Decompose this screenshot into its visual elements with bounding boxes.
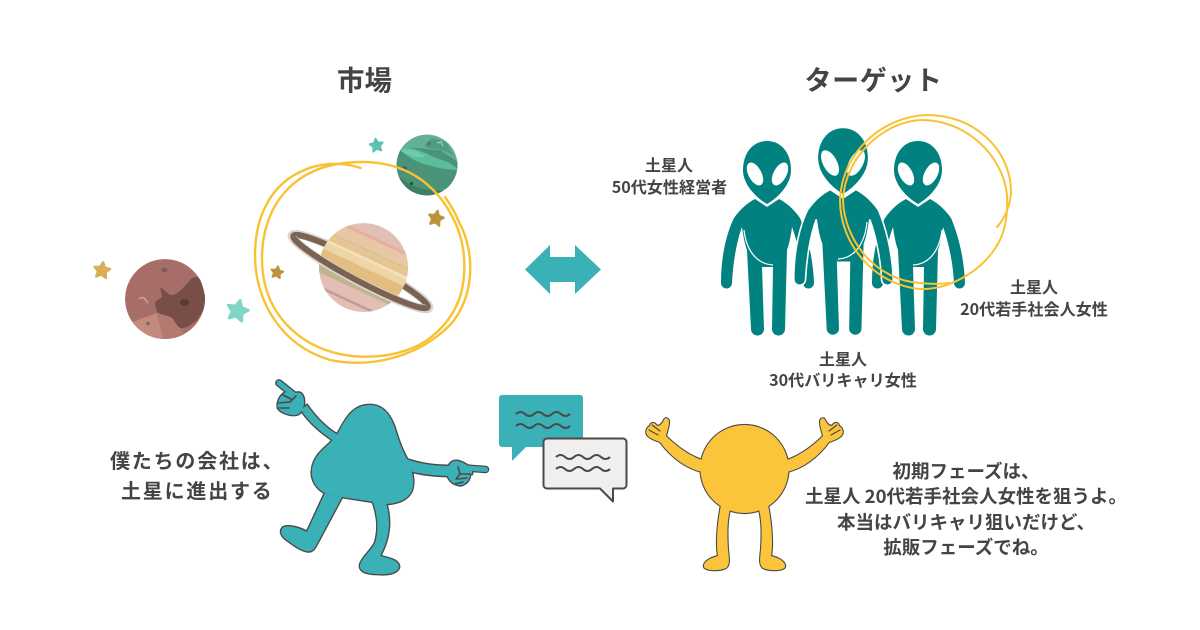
- text: initial phase explanation: 拡販フェーズでね。: [883, 534, 1049, 560]
- yellow scribble circle: market: [255, 162, 470, 363]
- saturn body bands: [319, 223, 408, 312]
- text: we enter saturn: 土星に進出する: [121, 475, 274, 504]
- text: initial phase explanation: [805, 458, 1127, 560]
- star: teal small: [369, 138, 384, 152]
- label: 50s executive: 土星人: [645, 152, 693, 176]
- text: initial phase explanation: 初期フェーズは、: [892, 458, 1040, 484]
- infographic: market and target: [93, 66, 1116, 576]
- label: 20s worker: 20代若手社会人女性: [960, 296, 1108, 320]
- star: mint: [225, 298, 250, 322]
- label: 30s career: 土星人: [819, 346, 867, 370]
- saturn ring, front: [287, 235, 429, 317]
- yellow outline layer: [646, 418, 843, 570]
- alien: middle: [794, 127, 893, 336]
- title: market: 市場: [337, 58, 392, 98]
- label: 20s worker: 土星人: [1010, 274, 1058, 298]
- label: 30s career: 30代バリキャリ女性: [769, 367, 917, 391]
- speech bubble: teal: [499, 395, 583, 461]
- character: yellow thumbs up: [646, 418, 843, 570]
- label: 30s career: [769, 346, 917, 391]
- double-headed arrow: [525, 245, 601, 294]
- text: initial phase explanation: 土星人 20代若手社会人女性を狙うよ。: [805, 483, 1127, 509]
- teal fill layer: [278, 383, 486, 574]
- speech bubble: white: [544, 438, 626, 502]
- star: gold left: [93, 261, 111, 278]
- thumb finger lines: [649, 425, 840, 435]
- text: initial phase explanation: 本当はバリキャリ狙いだけど、: [837, 509, 1095, 535]
- teal outline layer: [278, 383, 486, 574]
- aliens group: [721, 127, 965, 336]
- star: brown inner: [270, 265, 284, 279]
- label: 20s worker: [960, 274, 1108, 320]
- alien: left: [721, 141, 814, 336]
- text: we enter saturn: [110, 445, 284, 504]
- text: we enter saturn: 僕たちの会社は、: [110, 445, 284, 474]
- star: brown right: [427, 209, 445, 226]
- title: target: ターゲット: [804, 59, 942, 98]
- planet: saturn: [288, 223, 434, 314]
- character: teal pointing: [278, 383, 486, 574]
- label: 50s executive: 50代女性経営者: [612, 174, 727, 198]
- yellow fill layer: [646, 418, 843, 570]
- planet: mars: [124, 259, 207, 342]
- yellow scribble circle: target: [840, 115, 1011, 289]
- finger lines: [279, 395, 470, 484]
- label: 50s executive: [612, 152, 727, 198]
- stars around the planets: [93, 138, 445, 322]
- alien: right: [872, 141, 965, 336]
- saturn ring, back: [287, 226, 434, 317]
- planet: green: [396, 134, 458, 196]
